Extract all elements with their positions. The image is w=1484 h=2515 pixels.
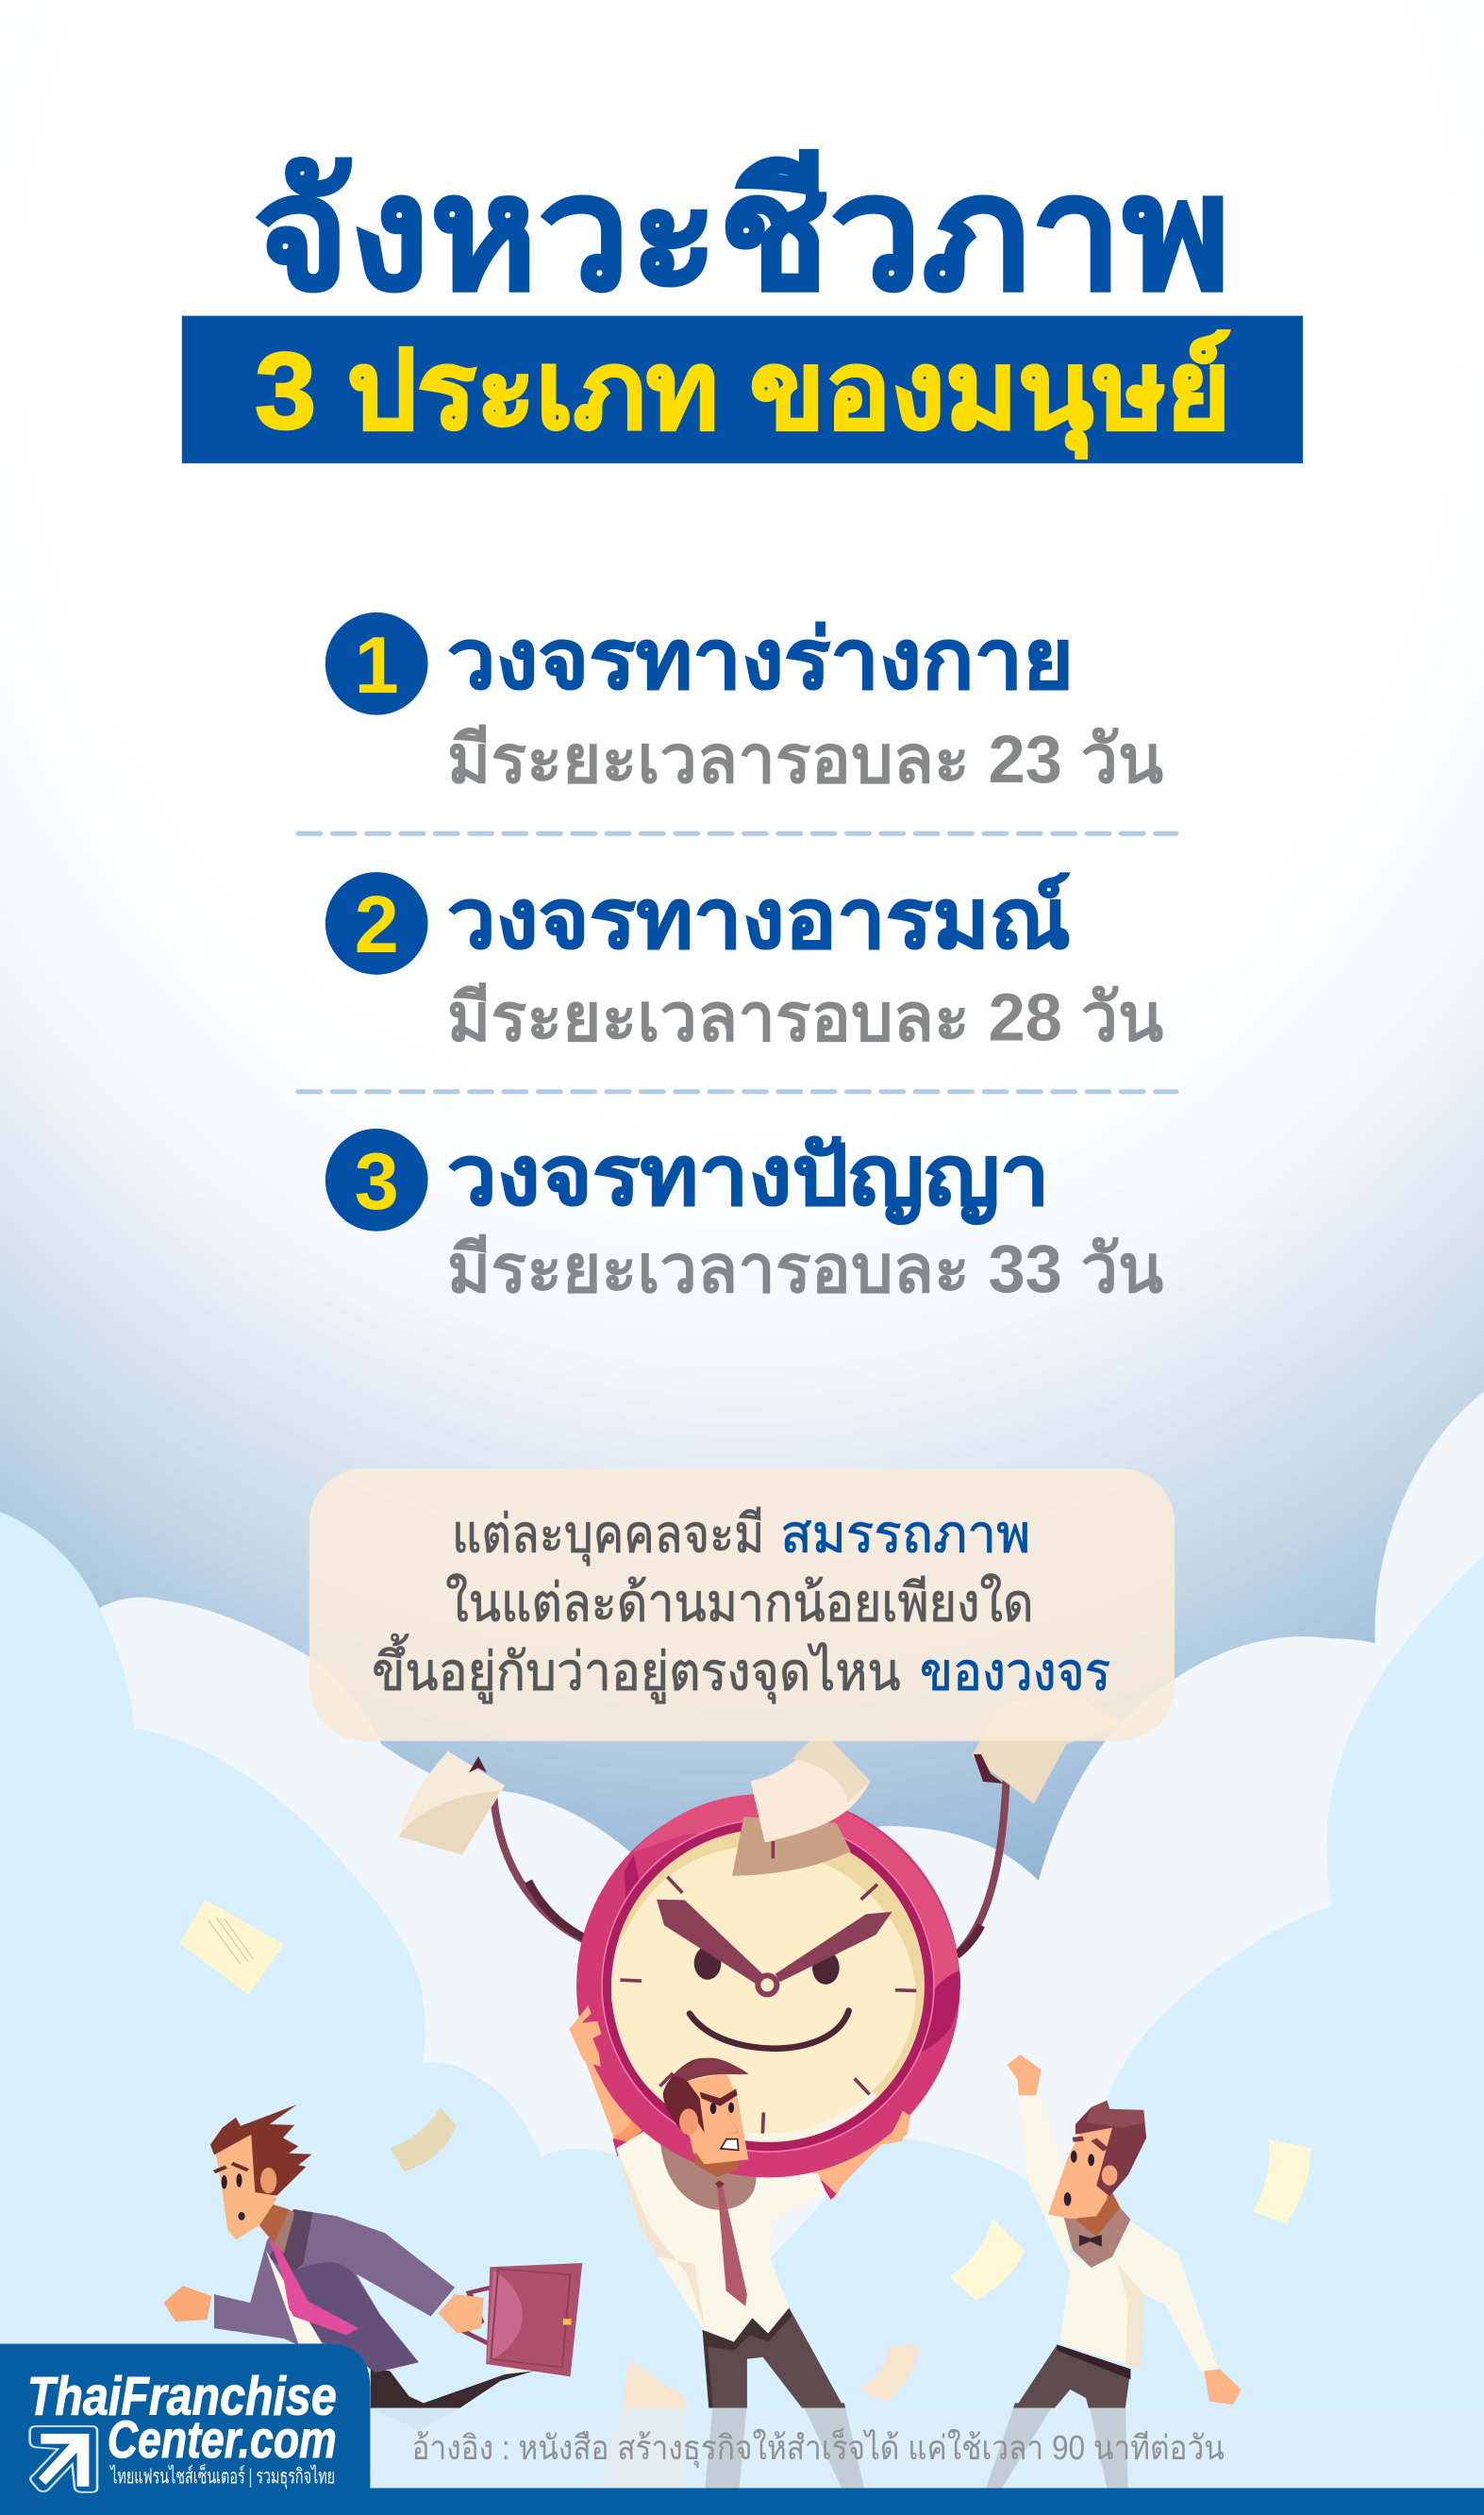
collar shadow <box>660 2128 757 2210</box>
tie <box>717 2186 747 2306</box>
icon: floating paper, left <box>179 1900 284 1994</box>
rear leg <box>371 2369 534 2408</box>
clock eyes <box>694 1946 721 1980</box>
centre man left arm <box>585 2045 649 2156</box>
illustration: running man <box>163 2104 582 2430</box>
logo: Center.com wordmark: Center.com <box>108 2409 337 2469</box>
right arm <box>813 2111 910 2199</box>
jacket <box>214 2209 455 2372</box>
icon: floating paper, low centre <box>858 2344 920 2402</box>
logo: Thai tagline: ไทยแฟรนไชส์เซ็นเตอร์ | รวมธุรกิจไทย <box>109 2462 335 2489</box>
logo panel <box>0 2344 370 2515</box>
clock ring <box>576 1794 960 2177</box>
callout panel <box>309 1468 1175 1741</box>
item 1 <box>325 612 1163 797</box>
shirt <box>1019 2095 1218 2372</box>
clock tick marks <box>620 1841 916 2134</box>
number badge 2 <box>325 872 428 975</box>
trousers <box>703 2308 844 2408</box>
front cloud layer <box>0 1512 1484 2515</box>
legs behind strip <box>986 2403 1055 2489</box>
item 3 heading: วงจรทางปัญญา <box>447 1129 1050 1226</box>
logo: arrow icon <box>30 2426 97 2492</box>
footer bar <box>0 2488 1484 2515</box>
hands <box>1008 2054 1042 2095</box>
centre man head and hands <box>569 2005 910 2177</box>
clock smile <box>690 2011 849 2049</box>
head <box>214 2133 276 2239</box>
icon: floating paper, low left <box>599 2360 686 2489</box>
title: จังหวะชีวภาพ <box>253 143 1231 323</box>
callout background <box>309 1468 1175 1741</box>
fists <box>163 2286 211 2322</box>
callout line 1: สมรรถภาพ <box>780 1503 1030 1563</box>
icon: floating paper, centre right <box>949 2219 1025 2301</box>
callout line 2: ในแต่ละด้านมากน้อยเพียงใด <box>445 1572 1034 1632</box>
illustration: centre man body <box>585 2045 910 2489</box>
illustration: clock character <box>493 1777 1007 2177</box>
collar <box>1064 2207 1130 2268</box>
item 3 <box>325 1129 1163 1307</box>
number badge 3 <box>325 1129 428 1232</box>
logo: ThaiFranchise wordmark: ThaiFranchise <box>27 2366 337 2426</box>
callout line 3: ขึ้นอยู่กับว่าอยู่ตรงจุดไหน <box>372 1634 901 1703</box>
source citation: อ้างอิง : หนังสือ สร้างธุรกิจให้สำเร็จได้ แค่ใช้เวลา 90 นาทีต่อวัน <box>412 2426 1225 2468</box>
item 2 <box>325 872 1163 1055</box>
trouser legs behind strip <box>705 2403 747 2489</box>
subtitle banner <box>182 316 1303 463</box>
item 1 heading: วงจรทางร่างกาย <box>447 612 1074 706</box>
item 2 heading: วงจรทางอารมณ์ <box>447 872 1071 965</box>
right hand gripping clock <box>890 2111 910 2140</box>
icon: floating paper, mid-left <box>390 2107 457 2171</box>
clock hands as brows <box>657 1900 762 1984</box>
number badge 2: 2 <box>355 880 399 969</box>
number badge 1: 1 <box>355 620 399 710</box>
callout line 1 <box>452 1503 1030 1566</box>
callout line 3: ของวงจร <box>920 1641 1110 1701</box>
callout line 1: แต่ละบุคคลจะมี <box>452 1503 764 1566</box>
item 2 duration: มีระยะเวลารอบละ 28 วัน <box>447 980 1163 1055</box>
clock face <box>611 1829 925 2142</box>
briefcase <box>486 2263 582 2376</box>
icon: paper over clock top <box>751 1730 871 1842</box>
clock arms <box>493 1798 583 1939</box>
item 1 duration: มีระยะเวลารอบละ 23 วัน <box>447 722 1163 797</box>
shirt and tie <box>266 2250 323 2343</box>
callout line 3 <box>372 1634 1110 1703</box>
left hand gripping clock <box>569 2005 601 2067</box>
illustration: surprised man <box>986 2054 1241 2489</box>
item 3 duration: มีระยะเวลารอบละ 33 วัน <box>447 1232 1163 1307</box>
icon: paper right of clock with arm <box>972 1689 1123 1804</box>
subtitle text: 3 ประเภท ของมนุษย์ <box>255 330 1231 459</box>
icon: floating paper, right <box>1253 2139 1310 2224</box>
icon: paper left of clock with arm <box>399 1752 505 1854</box>
neck <box>255 2199 293 2243</box>
shirt <box>616 2128 825 2342</box>
trousers <box>1015 2344 1130 2408</box>
number badge 3: 3 <box>355 1136 399 1226</box>
back cloud layer <box>0 1392 1484 2515</box>
source strip <box>372 2408 1484 2488</box>
briefcase handle <box>464 2288 491 2343</box>
head <box>1048 2128 1112 2219</box>
number badge 1 <box>325 612 428 715</box>
